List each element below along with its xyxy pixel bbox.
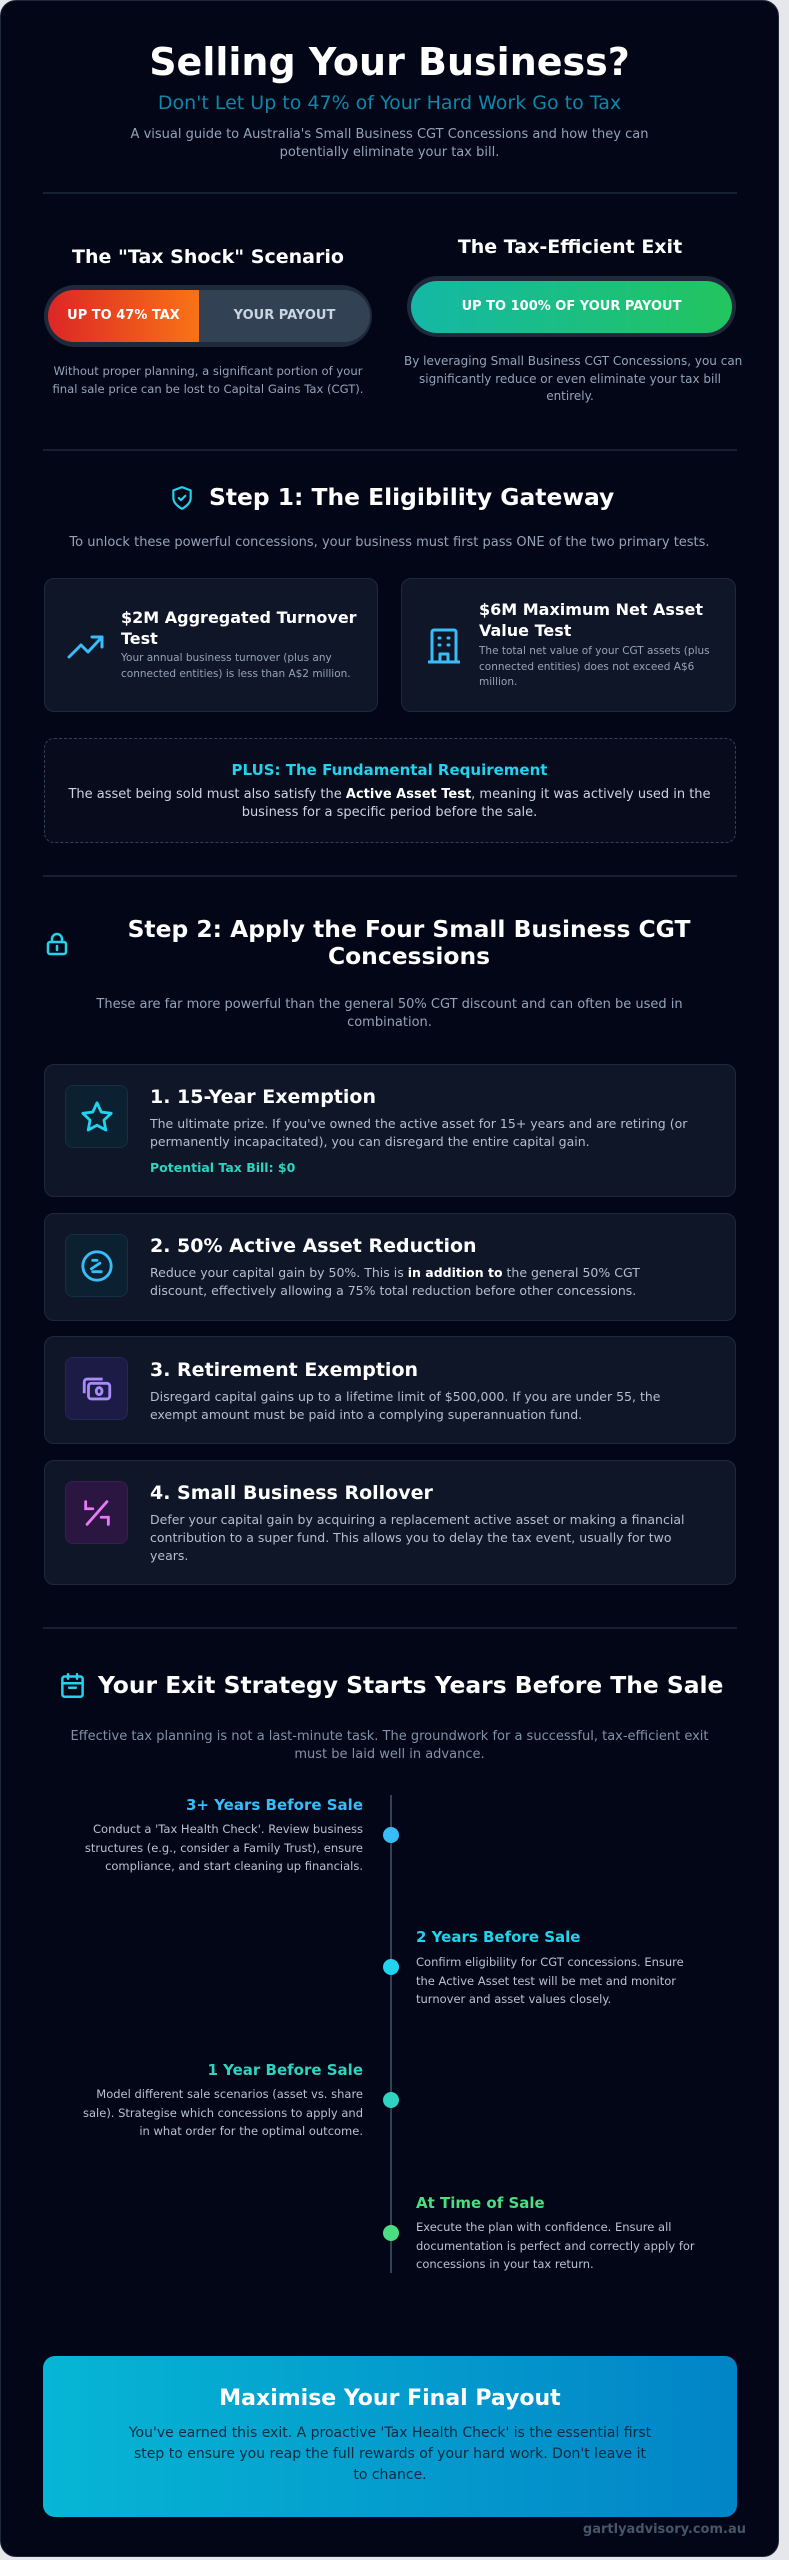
caption: tax-efficient exit (404, 354, 742, 403)
title: 15-year: 1. 15-Year Exemption (150, 1086, 376, 1108)
text: turnover test (121, 652, 351, 680)
subtitle: Don't Let Up to 47% of Your Hard Work Go to Tax (158, 92, 621, 114)
timeline item: 2 years (383, 1928, 684, 2006)
callout: active asset test (44, 738, 736, 843)
icon: shield check (172, 486, 192, 510)
text: turnover test: Your annual business turnover (plus any (121, 652, 332, 664)
timeline item: time of sale: Execute the plan with confidence. Ensure all (416, 2220, 671, 2234)
title: net asset test (479, 600, 703, 640)
text: 50% reduction (150, 1265, 640, 1298)
text: retirement (150, 1389, 660, 1422)
caption: tax-efficient exit: significantly reduce or even eliminate your tax bill (419, 372, 721, 386)
heading: step 2: Step 2: Apply the Four Small Business CGT (128, 915, 690, 943)
text: 15-year: The ultimate prize. If you've owned the active asset for 15+ years and are retiring (or (150, 1116, 687, 1131)
panel: tax shock scenario (44, 246, 372, 396)
caption: tax shock (52, 364, 364, 396)
step 2 intro: These are far more powerful than the general 50% CGT discount and can often be used in (96, 997, 683, 1012)
caption: tax-efficient exit: By leveraging Small Business CGT Concessions, you can (404, 354, 742, 368)
title: net asset test: $6M Maximum Net Asset (479, 600, 703, 619)
icon: calendar (61, 1673, 84, 1698)
text: rollover: Defer your capital gain by acquiring a replacement active asset or making a financial (150, 1512, 684, 1527)
panel: 15-year exemption (44, 1064, 736, 1197)
callout title: PLUS: The Fundamental Requirement (232, 761, 547, 779)
title: net asset test: Value Test (479, 621, 571, 640)
timeline item: time of sale: documentation is perfect and correctly apply for (416, 2238, 695, 2252)
bar: full payout (407, 276, 736, 337)
caption: tax shock: Without proper planning, a significant portion of your (54, 364, 362, 378)
icon: banknotes (65, 1357, 128, 1420)
timeline (83, 1795, 695, 2273)
heading: step 2 (46, 915, 690, 970)
title: 50% reduction: 2. 50% Active Asset Reduction (150, 1235, 477, 1257)
text: rollover (150, 1512, 684, 1563)
panel: rollover (44, 1460, 736, 1585)
timeline item: 2 years: the Active Asset test will be met and monitor (416, 1974, 676, 1988)
timeline item: 3+ years: 3+ Years Before Sale (186, 1796, 363, 1814)
title: Selling Your Business? (149, 40, 630, 84)
exit strategy intro (70, 1729, 709, 1762)
icon: percent circle (65, 1234, 128, 1297)
panel: tax-efficient exit (404, 236, 742, 403)
timeline item: 1 year: 1 Year Before Sale (207, 2061, 363, 2079)
footer: website: gartlyadvisory.com.au (583, 2522, 746, 2537)
text: retirement: Disregard capital gains up to a lifetime limit of $500,000. If you are under 55, the (150, 1389, 660, 1404)
intro text (130, 127, 648, 160)
panel: retirement exemption (44, 1336, 736, 1444)
step 1 intro: To unlock these powerful concessions, your business must first pass ONE of the two primary tests. (69, 535, 710, 550)
callout text: The asset being sold must also satisfy the Active Asset Test, meaning it was actively used in the (68, 787, 711, 802)
panel: turnover test (44, 578, 378, 712)
bar: full payout: UP TO 100% OF YOUR PAYOUT (462, 299, 681, 314)
icon: building (428, 628, 460, 664)
cta text (128, 2425, 651, 2483)
text: 15-year: permanently incapacitated), you can disregard the entire capital gain. (150, 1134, 590, 1149)
heading: tax-efficient exit: The Tax-Efficient Exit (458, 236, 682, 258)
text: rollover: contribution to a super fund. This allows you to delay the tax event, usually for two (150, 1530, 672, 1545)
text: net asset test: connected entities) does not exceed A$6 (479, 660, 694, 672)
cta text: to chance. (353, 2467, 427, 2483)
caption: tax-efficient exit: entirely. (546, 389, 594, 403)
text: turnover test: connected entities) is less than A$2 million. (121, 668, 351, 680)
title: retirement: 3. Retirement Exemption (150, 1359, 418, 1381)
icon: star (65, 1085, 128, 1148)
heading: step 1: Step 1: The Eligibility Gateway (209, 483, 614, 511)
heading: exit strategy: Your Exit Strategy Starts Years Before The Sale (98, 1671, 723, 1699)
bar: tax vs payout (44, 285, 372, 347)
timeline item: 1 year: in what order for the optimal outcome. (139, 2124, 363, 2138)
timeline item: 2 years: 2 Years Before Sale (416, 1928, 580, 1946)
text: 50% reduction: discount, effectively allowing a 75% total reduction before other concessions. (150, 1283, 636, 1298)
icon: lock (46, 932, 68, 956)
text: 50% reduction: Reduce your capital gain by 50%. This is in addition to the general 50% CGT (150, 1265, 640, 1280)
timeline item: 1 year: sale). Strategise which concessions to apply and (83, 2106, 363, 2120)
text: retirement: exempt amount must be paid into a complying superannuation fund. (150, 1407, 582, 1422)
title: rollover: 4. Small Business Rollover (150, 1482, 433, 1504)
intro text: potentially eliminate your tax bill. (280, 145, 499, 160)
timeline item: 3+ years: Conduct a 'Tax Health Check'. Review business (93, 1822, 363, 1836)
heading: tax shock: The "Tax Shock" Scenario (72, 246, 344, 268)
cta text: step to ensure you reap the full rewards of your hard work. Don't leave it (134, 2446, 646, 2462)
timeline item: 2 years: Confirm eligibility for CGT concessions. Ensure (416, 1955, 684, 1969)
icon: rollover arrows (65, 1481, 128, 1544)
heading: step 2: Concessions (328, 942, 490, 970)
cta text: You've earned this exit. A proactive 'Tax Health Check' is the essential first (129, 2425, 651, 2441)
text: 15-year (150, 1116, 688, 1149)
timeline item: 2 years: turnover and asset values closely. (416, 1992, 611, 2006)
panel: net asset test (401, 578, 736, 712)
title: turnover test: Test (121, 629, 158, 648)
timeline item: time of sale: concessions in your tax return. (416, 2257, 594, 2271)
panel: 50% reduction (44, 1213, 736, 1321)
callout: maximise payout (43, 2356, 737, 2517)
timeline item: 3+ years: compliance, and start cleaning up financials. (105, 1859, 363, 1873)
timeline item: time of sale (383, 2194, 695, 2271)
highlight: tax bill: Potential Tax Bill: $0 (150, 1160, 295, 1175)
bar: tax vs payout: UP TO 47% TAX (67, 308, 180, 323)
bar: tax vs payout: YOUR PAYOUT (234, 308, 335, 323)
timeline item: 1 year (83, 2061, 399, 2138)
timeline item: time of sale: At Time of Sale (416, 2194, 545, 2212)
text: net asset test: The total net value of your CGT assets (plus (479, 645, 710, 657)
cta title: Maximise Your Final Payout (219, 2386, 561, 2411)
timeline item: 3+ years: structures (e.g., consider a Family Trust), ensure (85, 1840, 363, 1854)
step 2 intro: combination. (347, 1015, 432, 1030)
text: rollover: years. (150, 1548, 188, 1563)
exit strategy intro: Effective tax planning is not a last-minute task. The groundwork for a successful, tax-efficient exit (70, 1729, 709, 1744)
title: turnover test (121, 608, 357, 648)
caption: tax shock: final sale price can be lost to Capital Gains Tax (CGT). (52, 382, 364, 396)
text: net asset test (478, 645, 710, 688)
text: net asset test: million. (479, 676, 517, 688)
exit strategy intro: must be laid well in advance. (294, 1747, 485, 1762)
step 2 intro (96, 997, 683, 1030)
callout text: business for a specific period before the sale. (242, 805, 537, 820)
icon: trending up (67, 635, 104, 659)
timeline item: 3+ years (85, 1796, 399, 1873)
callout text (68, 787, 711, 820)
timeline item: 1 year: Model different sale scenarios (asset vs. share (96, 2087, 363, 2101)
intro text: A visual guide to Australia's Small Business CGT Concessions and how they can (131, 127, 648, 142)
title: turnover test: $2M Aggregated Turnover (121, 608, 357, 627)
